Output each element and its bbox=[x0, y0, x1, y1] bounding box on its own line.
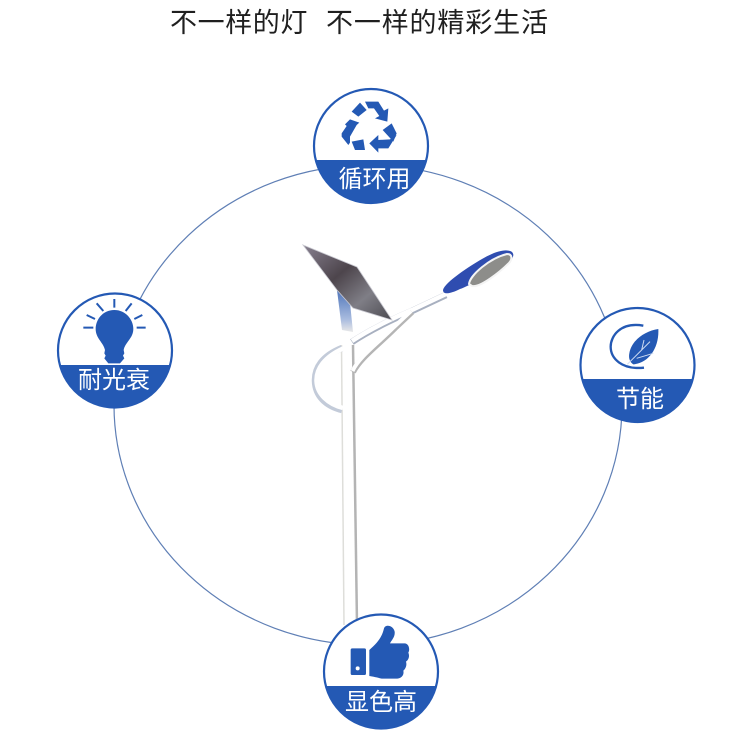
pole top under panel bbox=[337, 290, 353, 332]
icon: leaf bbox=[611, 325, 658, 368]
badge: low light decay bbox=[54, 294, 176, 415]
label: 节能 bbox=[616, 386, 664, 413]
icon: recycle bbox=[342, 102, 397, 153]
lamp shell bbox=[443, 250, 513, 293]
band bbox=[327, 686, 435, 728]
curved arm bbox=[315, 348, 342, 410]
subtitle: 不一样的精彩生活 bbox=[326, 8, 549, 38]
badge: high color rendering bbox=[320, 614, 442, 736]
pole right edge bbox=[353, 345, 357, 625]
orbit ring bbox=[114, 165, 622, 645]
title: 不一样的灯 bbox=[170, 8, 308, 38]
solar panel bbox=[303, 245, 392, 320]
lower arm bbox=[353, 312, 412, 372]
pole left edge bbox=[342, 345, 344, 625]
badge: energy saving bbox=[577, 308, 699, 429]
icon: light bulb bbox=[83, 299, 146, 363]
label: 循环用 bbox=[338, 166, 410, 193]
lamp pole bbox=[342, 330, 358, 625]
band bbox=[583, 379, 692, 421]
street lamp bbox=[303, 245, 513, 625]
icon: thumbs up bbox=[351, 626, 409, 679]
label: 显色高 bbox=[345, 689, 417, 716]
lamp lens bbox=[469, 254, 511, 286]
label: 耐光衰 bbox=[78, 367, 150, 394]
lamp head bbox=[443, 250, 513, 293]
badge: recycling bbox=[310, 89, 432, 210]
band bbox=[317, 160, 425, 202]
upper arm bbox=[352, 295, 446, 342]
band bbox=[61, 365, 169, 406]
